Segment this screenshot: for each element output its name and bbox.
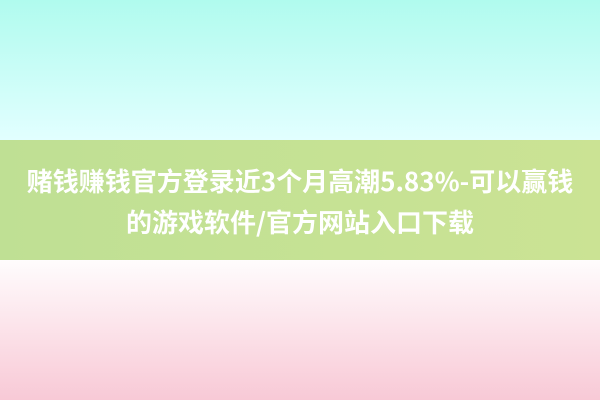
title <box>27 162 573 240</box>
panel: top gradient <box>0 0 600 140</box>
title: 赌钱赚钱官方登录近3个月高潮5.83%-可以赢钱 <box>27 162 573 199</box>
panel: green title band <box>0 140 600 260</box>
panel: bottom gradient <box>0 260 600 400</box>
title: 的游戏软件/官方网站入口下载 <box>126 203 474 240</box>
